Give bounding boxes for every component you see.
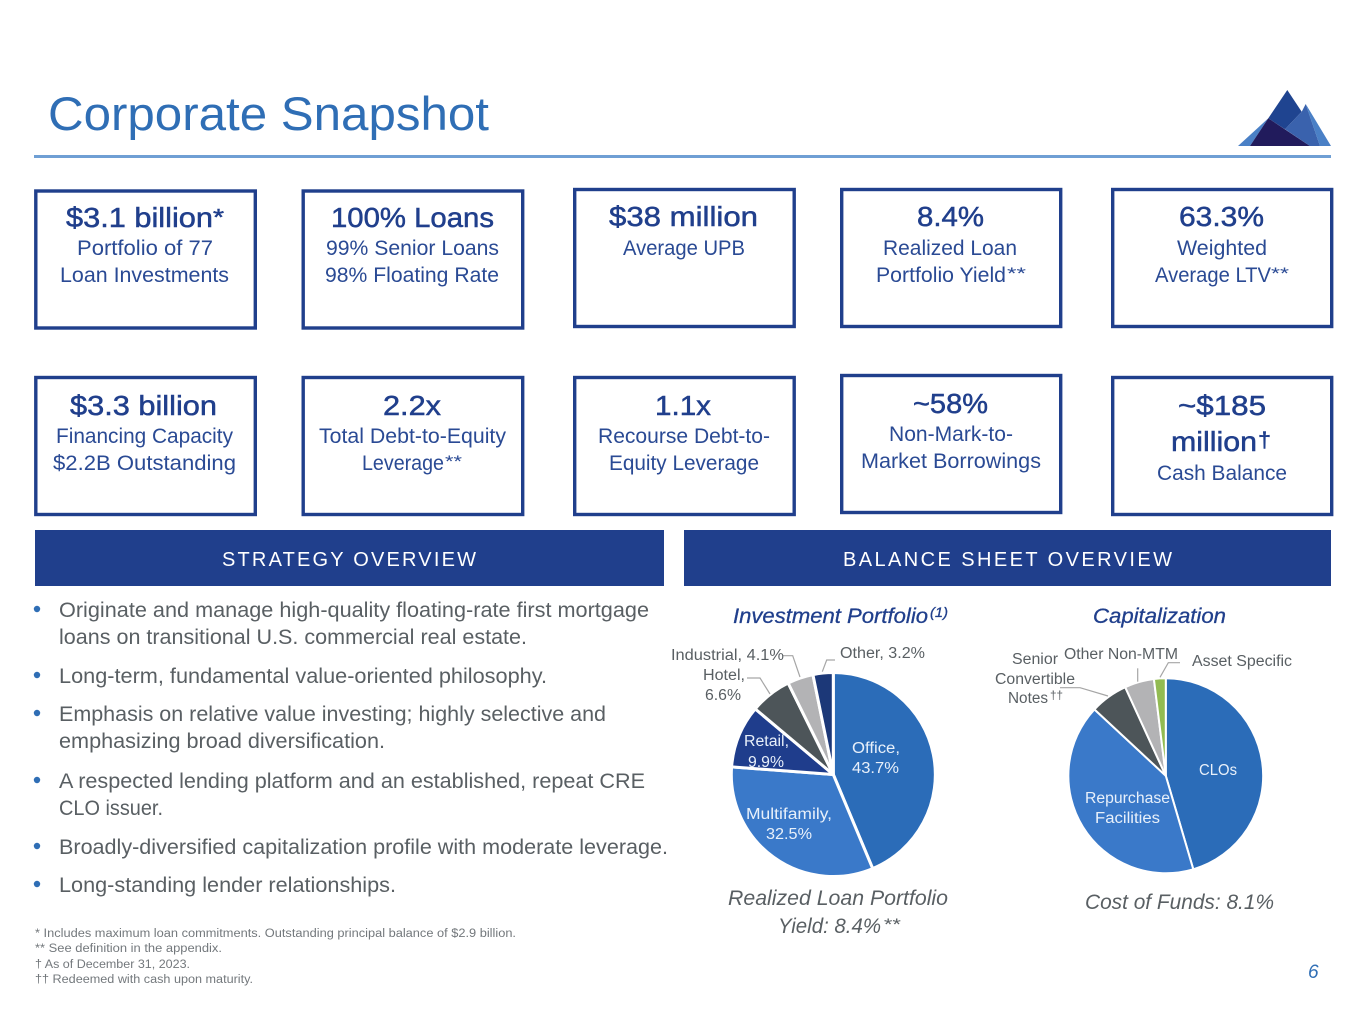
chart: investment portfolio pie: 6.6% (705, 687, 741, 704)
heading: investment portfolio: Investment Portfolio (733, 605, 928, 628)
caption: realized loan portfolio yield: ** (883, 915, 902, 934)
chart: capitalization pie: Facilities (1095, 810, 1160, 827)
heading: balance sheet overview: BALANCE SHEET OVERVIEW (843, 549, 1172, 571)
panel: weighted LTV: ** (1271, 264, 1290, 283)
heading: balance sheet overview (684, 530, 1331, 586)
text block: strategy bullets: emphasizing broad diversification. (59, 729, 385, 753)
panel: weighted LTV (1113, 190, 1332, 326)
panel: non-mark-to-market (842, 376, 1061, 512)
panel: portfolio size: Portfolio of 77 (77, 237, 213, 260)
text block: strategy bullets: Long-term, fundamental value-oriented philosophy. (59, 664, 547, 688)
panel: non-mark-to-market: Non-Mark-to- (889, 423, 1013, 446)
chart: capitalization pie: Convertible (995, 671, 1075, 688)
panel: loans: 99% Senior Loans (326, 237, 499, 260)
panel: loans: 98% Floating Rate (325, 264, 499, 287)
chart: capitalization pie: Notes (1008, 690, 1048, 707)
text block: footnotes: †† Redeemed with cash upon maturity. (35, 974, 253, 986)
page number: 6 (1308, 962, 1319, 983)
panel: recourse leverage: Equity Leverage (609, 452, 759, 475)
text block: strategy bullets: Emphasis on relative value investing; highly selective and (59, 702, 606, 726)
text block: footnotes: * Includes maximum loan commitments. Outstanding principal balance of $2.9 billion. (35, 928, 516, 940)
panel: average UPB: Average UPB (623, 237, 745, 260)
text block: strategy bullets: Long-standing lender relationships. (59, 873, 396, 897)
panel: total leverage: Leverage (362, 452, 444, 475)
heading: strategy overview: STRATEGY OVERVIEW (222, 549, 476, 571)
chart: capitalization pie (995, 646, 1292, 873)
heading: capitalization: Capitalization (1093, 605, 1226, 628)
panel: financing capacity: Financing Capacity (56, 425, 233, 448)
panel: total leverage (303, 378, 523, 514)
chart: investment portfolio pie: Office, (852, 740, 900, 757)
panel: realized yield: Realized Loan (883, 237, 1017, 260)
text block: strategy bullets (34, 598, 668, 897)
text block: strategy bullets: Broadly-diversified capitalization profile with moderate leverage. (59, 835, 668, 859)
chart: capitalization pie: Other Non-MTM (1064, 646, 1178, 663)
panel: realized yield: ** (1007, 264, 1027, 283)
chart: investment portfolio pie: Retail, (744, 733, 789, 750)
panel: cash balance: † (1258, 429, 1271, 452)
panel: realized yield: 8.4% (917, 201, 984, 232)
text block: footnotes: ** See definition in the appendix. (35, 943, 222, 955)
panel: realized yield: Portfolio Yield (876, 264, 1006, 287)
text block: strategy bullets: loans on transitional U.S. commercial real estate. (59, 625, 527, 649)
panel: non-mark-to-market: Market Borrowings (861, 450, 1041, 473)
panel: financing capacity: $3.3 billion (70, 390, 217, 421)
panel: portfolio size: Loan Investments (60, 264, 229, 287)
icon: mountain logo (1238, 90, 1331, 146)
panel: recourse leverage (575, 378, 794, 514)
caption: realized loan portfolio yield: Realized Loan Portfolio (728, 887, 948, 910)
panel: weighted LTV: Average LTV (1155, 264, 1271, 287)
panel: non-mark-to-market: ~58% (913, 388, 988, 419)
panel: recourse leverage: Recourse Debt-to- (598, 425, 770, 448)
panel: total leverage: ** (445, 452, 462, 471)
text block: footnotes (35, 928, 516, 986)
panel: total leverage: Total Debt-to-Equity (319, 425, 507, 448)
chart: capitalization pie: Repurchase (1085, 790, 1170, 807)
panel: weighted LTV: 63.3% (1179, 201, 1264, 232)
chart: investment portfolio pie (671, 645, 935, 877)
chart: investment portfolio pie: 9.9% (748, 754, 784, 771)
panel: realized yield (842, 190, 1061, 326)
panel: cash balance: Cash Balance (1157, 462, 1287, 485)
heading: investment portfolio: (1) (930, 604, 948, 620)
heading: strategy overview (35, 530, 664, 586)
panel: financing capacity: $2.2B Outstanding (53, 452, 236, 475)
panel: total leverage: 2.2x (383, 390, 441, 421)
panel: loans: 100% Loans (331, 202, 494, 233)
text block: strategy bullets: CLO issuer. (59, 796, 163, 820)
text block: footnotes: † As of December 31, 2023. (35, 959, 190, 971)
caption: realized loan portfolio yield: Yield: 8.4% (778, 915, 881, 938)
panel: portfolio size (36, 191, 255, 328)
chart: capitalization pie: †† (1050, 688, 1063, 702)
panel: recourse leverage: 1.1x (655, 390, 711, 421)
chart: capitalization pie: Senior (1012, 651, 1058, 668)
panel: portfolio size: * (213, 204, 224, 230)
panel: cash balance: ~$185 (1178, 390, 1266, 421)
chart: investment portfolio pie: 32.5% (766, 826, 812, 843)
text block: strategy bullets: Originate and manage high-quality floating-rate first mortgage (59, 598, 649, 622)
panel: cash balance (1113, 378, 1332, 514)
caption: cost of funds: Cost of Funds: 8.1% (1085, 891, 1274, 914)
chart: investment portfolio pie: Other, 3.2% (840, 645, 925, 662)
chart: investment portfolio pie: 43.7% (852, 760, 899, 777)
panel: weighted LTV: Weighted (1177, 237, 1267, 260)
caption: realized loan portfolio yield (728, 887, 948, 938)
chart: capitalization pie: CLOs (1199, 762, 1237, 779)
chart: investment portfolio pie: Industrial, 4.1% (671, 647, 784, 664)
text block: strategy bullets: A respected lending platform and an established, repeat CRE (59, 769, 645, 793)
panel: average UPB: $38 million (609, 201, 758, 232)
chart: investment portfolio pie: Hotel, (703, 667, 745, 684)
panel: loans (303, 191, 523, 328)
panel: portfolio size: $3.1 billion (66, 202, 213, 233)
title: Corporate Snapshot (48, 87, 489, 140)
panel: financing capacity (36, 378, 255, 514)
chart: capitalization pie: Asset Specific (1192, 653, 1292, 670)
panel: average UPB (575, 190, 794, 326)
chart: investment portfolio pie: Multifamily, (746, 806, 832, 823)
panel: cash balance: million (1171, 426, 1257, 457)
